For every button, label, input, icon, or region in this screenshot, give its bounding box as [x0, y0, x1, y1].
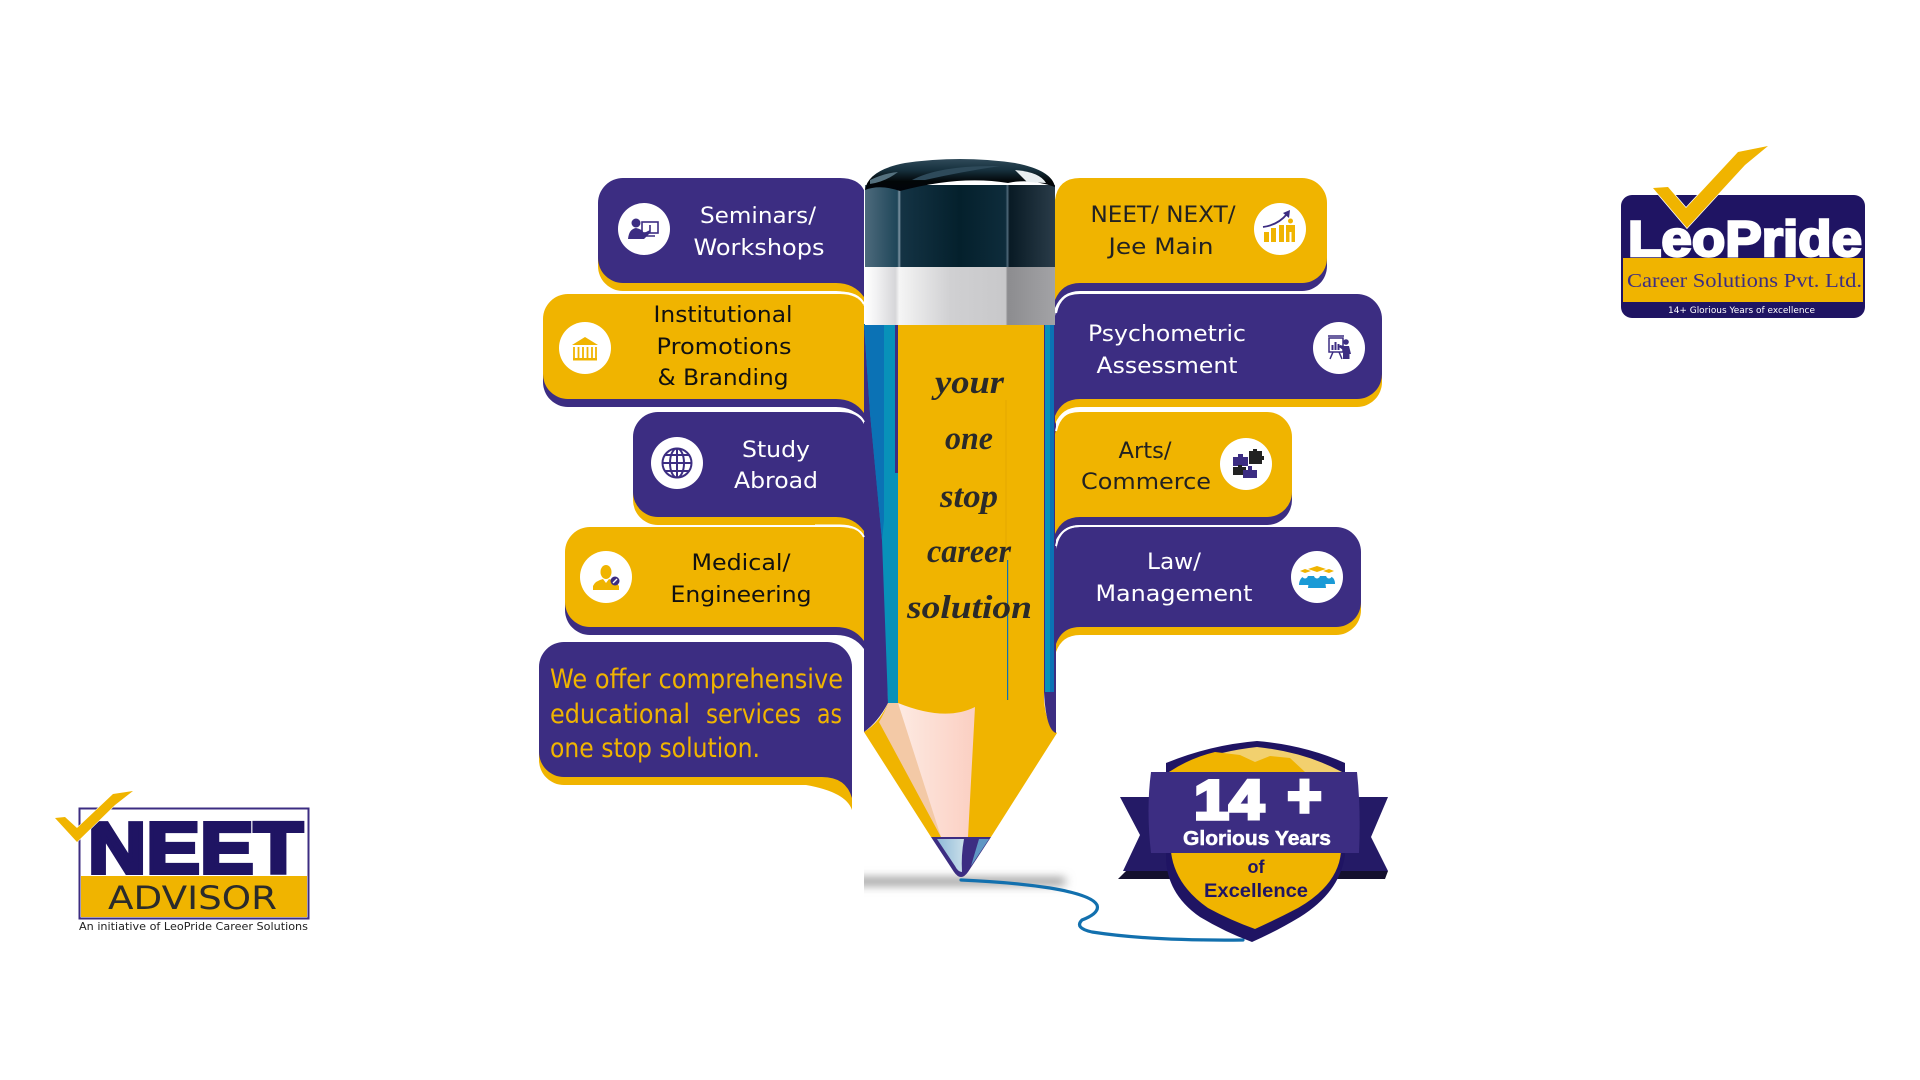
panel: Seminars/Workshops: Workshops: [694, 236, 824, 261]
pencil lead: [931, 837, 991, 877]
pencil slogan: career: [927, 534, 1012, 570]
badge: 14+ years: of: [1248, 857, 1265, 877]
panel: Medical/Engineering: [565, 526, 864, 649]
logo: NEET Advisor: ADVISOR: [108, 879, 277, 917]
panel: Arts/Commerce: Arts/: [1118, 439, 1172, 464]
icon: globe: [651, 437, 703, 489]
panel: Study Abroad: Study: [742, 438, 810, 463]
icon: institution: [559, 322, 611, 374]
icon: graduates: [1291, 551, 1343, 603]
pencil barrel: [864, 324, 1057, 837]
logo: LeoPride: 14+ Glorious Years of excellence: [1668, 306, 1815, 316]
panel: Psychometric Assessment: Psychometric: [1088, 322, 1246, 347]
panel: Seminars/Workshops: [598, 178, 864, 305]
panel: description callout: educational: [550, 699, 690, 730]
panel: Study Abroad: Abroad: [734, 469, 818, 494]
panel: Institutional Promotions & Branding: & Branding: [658, 366, 788, 391]
icon: puzzle pieces: [1220, 438, 1272, 490]
logo: LeoPride: [1621, 146, 1865, 318]
ribbon tails: [1118, 797, 1388, 879]
panel: Law/Management: Management: [1096, 582, 1253, 607]
panel: description callout: We offer comprehensive: [550, 664, 843, 695]
badge: 14+ years: 14: [1194, 768, 1264, 831]
badge: 14+ years: +: [1287, 762, 1322, 831]
panel: Arts/Commerce: Commerce: [1081, 470, 1211, 495]
icon: seminar: [618, 203, 670, 255]
badge: 14+ years: [1118, 741, 1388, 942]
panel: description callout: [539, 642, 852, 810]
logo: NEET Advisor: [55, 791, 308, 933]
panel: description callout: one stop solution.: [550, 733, 760, 764]
panel: Medical/Engineering: Engineering: [670, 583, 812, 608]
pencil slogan: [906, 365, 1032, 626]
icon: check mark: [1653, 146, 1768, 228]
drawn blue line: [961, 880, 1243, 940]
panel: Study Abroad: [633, 410, 864, 539]
icon: presentation: [1313, 322, 1365, 374]
shield: [1166, 741, 1345, 942]
logo: LeoPride: Career Solutions Pvt. Ltd.: [1627, 270, 1862, 292]
icon: doctor and engineer: [580, 551, 632, 603]
panel: NEET/NEXT/Jee Main: Jee Main: [1106, 235, 1214, 260]
panel: NEET/NEXT/Jee Main: NEET/ NEXT/: [1090, 203, 1236, 228]
panel: Institutional Promotions & Branding: Promotions: [656, 335, 792, 360]
panel: Institutional Promotions & Branding: Institutional: [654, 303, 792, 328]
panel: Arts/Commerce: [1055, 410, 1292, 542]
panel: description callout: as: [817, 699, 842, 730]
panel: description callout: services: [706, 699, 801, 730]
pencil slogan: stop: [939, 479, 998, 515]
panel: NEET/NEXT/Jee Main: [1055, 178, 1327, 308]
pencil shadow: [850, 877, 1065, 886]
pencil slogan: one: [945, 421, 993, 457]
pencil slogan: solution: [906, 590, 1032, 626]
panel: Law/Management: [1056, 526, 1361, 652]
logo: LeoPride: LeoPride: [1628, 211, 1862, 267]
icon: check mark: [55, 791, 133, 842]
icon: growth chart: [1254, 203, 1306, 255]
logo: NEET Advisor: An initiative of LeoPride Career Solutions: [79, 920, 308, 933]
logo: NEET Advisor: NEET: [88, 809, 303, 889]
panel: Medical/Engineering: Medical/: [692, 551, 791, 576]
pencil: [850, 159, 1243, 940]
panel: Law/Management: Law/: [1147, 550, 1202, 575]
panel: Psychometric Assessment: [1055, 292, 1382, 424]
banner: [1148, 772, 1360, 853]
badge: 14+ years: Excellence: [1204, 881, 1308, 902]
pencil slogan: your: [931, 365, 1005, 401]
badge: 14+ years: Glorious Years: [1183, 828, 1331, 850]
panel: Institutional Promotions & Branding: [543, 292, 864, 421]
panel: Seminars/Workshops: Seminars/: [700, 204, 817, 229]
pencil wood tip: [879, 703, 975, 837]
panel: Psychometric Assessment: Assessment: [1096, 354, 1238, 379]
pencil cap: [865, 159, 1055, 325]
